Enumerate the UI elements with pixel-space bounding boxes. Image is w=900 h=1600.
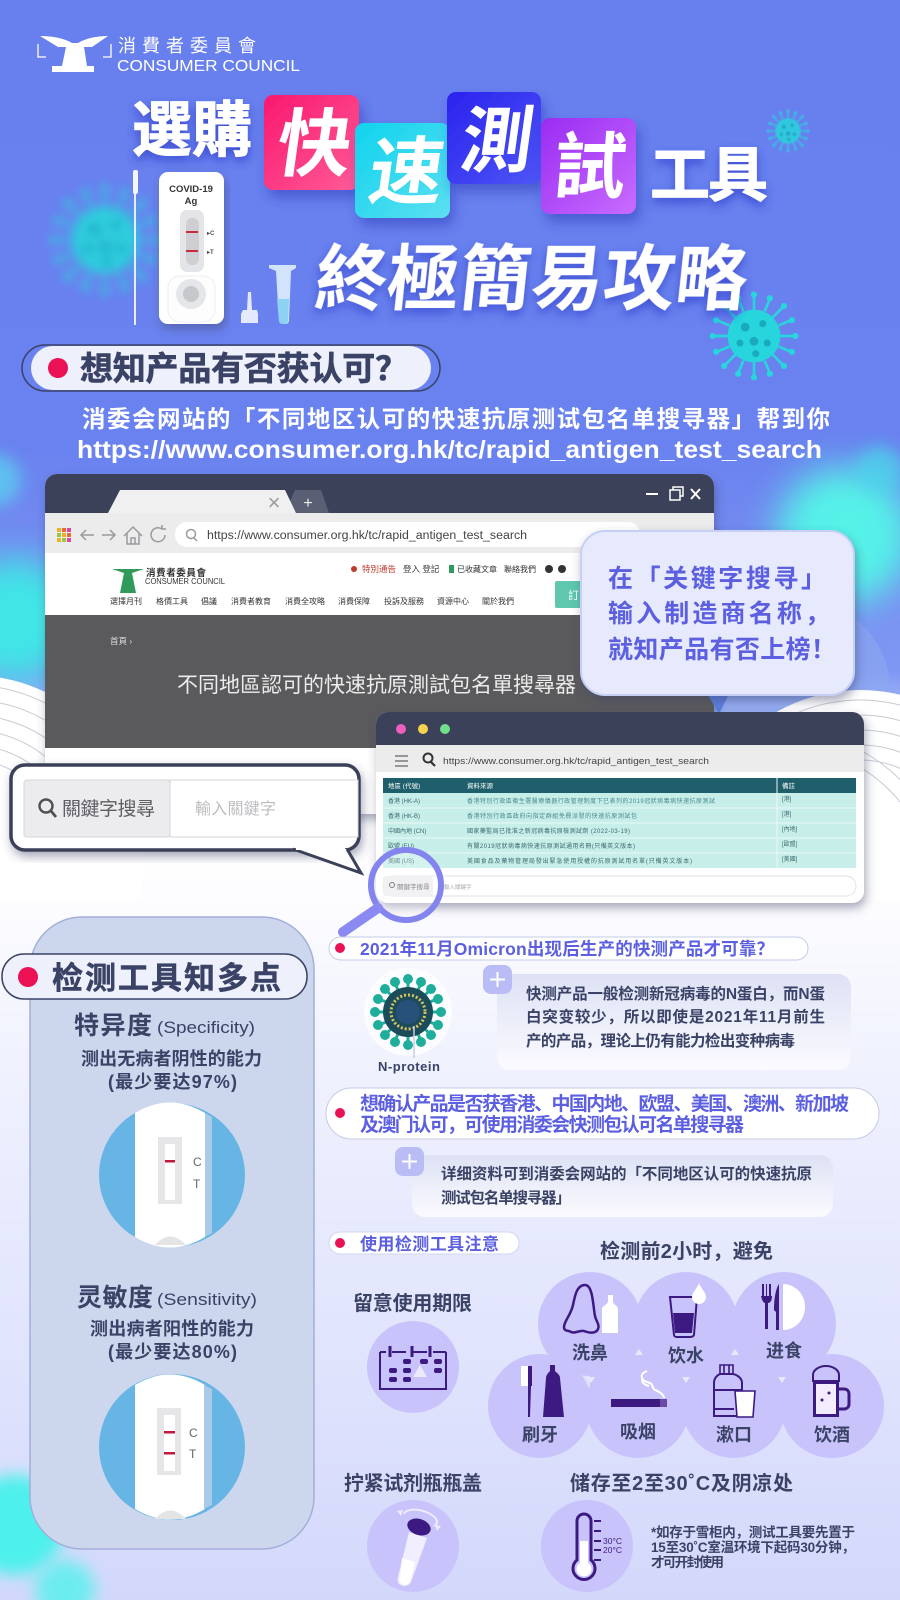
window bar — [376, 712, 864, 745]
table: 美國 (US) — [388, 857, 414, 865]
pill: approval check — [326, 1088, 879, 1139]
card: details — [395, 1147, 833, 1217]
icon: virus top right — [767, 110, 809, 152]
icon: cutlery — [761, 1284, 805, 1361]
specificity text — [74, 1012, 262, 1092]
note: expiry date — [353, 1291, 472, 1413]
icon: scales of justice — [38, 36, 111, 72]
table: 香港特別行政區衞生署醫療儀器行政管理制度下已表列的2019冠狀病毒病快速抗原測試 — [467, 797, 715, 805]
heading: 检测工具知多点 — [2, 954, 307, 999]
title: 工具: 工具 — [650, 142, 768, 209]
site nav: 消費保障 — [338, 596, 370, 606]
site logo: 消費者委員會 — [146, 567, 206, 579]
card: details: 测试包名单搜寻器」 — [441, 1188, 571, 1207]
site hero: 不同地區認可的快速抗原測試包名單搜尋器 — [177, 674, 576, 697]
swab — [134, 192, 136, 325]
site top links: 特別通告 — [362, 564, 396, 574]
subscribe button: 訂閱 — [568, 588, 590, 602]
tile: 試: 試 — [551, 128, 630, 208]
site nav: 關於我們 — [482, 596, 514, 606]
cloud circles — [488, 1272, 884, 1458]
tube — [269, 265, 296, 324]
site nav: 格價工具 — [156, 596, 188, 606]
icon: magnifier — [343, 850, 441, 932]
panel: browser window main — [45, 474, 714, 814]
title — [132, 92, 768, 320]
tile: 測: 測 — [456, 102, 539, 182]
note: storage: 储存至2至30˚C及阴凉处 — [570, 1472, 793, 1495]
browser title bar: + — [303, 495, 313, 512]
toolbar: https://www.consumer.org.hk/tc/rapid_antigen_test_search — [443, 756, 709, 767]
toolbar — [376, 745, 864, 772]
sensitivity text: (最少要达80%) — [108, 1342, 237, 1362]
icon: test kit — [133, 170, 296, 325]
site nav: 選擇月刊 — [110, 596, 142, 606]
card: N protein explanation: 产的产品，理论上仍有能力检出变种病毒 — [526, 1031, 795, 1050]
sensitivity text: (Sensitivity) — [157, 1291, 257, 1309]
plus badge — [395, 1147, 424, 1176]
icon: nose: 洗鼻 — [572, 1343, 608, 1363]
specificity text: (最少要达97%) — [108, 1072, 237, 1092]
table: 香港 (HK-B) — [388, 812, 420, 820]
icon: thermometer: 20°C — [603, 1545, 622, 1555]
tile: 速: 速 — [364, 131, 449, 214]
site nav: 倡議 — [201, 596, 217, 606]
note: storage — [541, 1472, 855, 1592]
site header — [45, 553, 714, 615]
storage footnote — [651, 1524, 855, 1570]
sensitivity text: 测出病者阳性的能力 — [90, 1318, 254, 1339]
site top links: 聯絡我們 — [504, 564, 536, 574]
text: search tool intro: 消委会网站的「不同地区认可的快速抗原测试包名单搜寻器」帮到你 — [82, 406, 830, 432]
cassette: ▸T — [206, 250, 214, 256]
icon: N-protein virus — [364, 968, 452, 1074]
dropper — [241, 292, 258, 323]
storage footnote: 15至30˚C室温环境下起码30分钟， — [651, 1539, 855, 1555]
title: 選購: 選購 — [132, 97, 252, 164]
site top links: 已收藏文章 — [457, 564, 497, 574]
callout: keyword search tip: 就知产品有否上榜！ — [608, 636, 836, 664]
test strip C and T — [99, 1374, 245, 1520]
callout: keyword search tip: 输入制造商名称， — [608, 600, 830, 628]
background blurred teal blobs — [0, 446, 900, 1600]
keyword input — [170, 780, 358, 837]
text: search tool intro — [77, 406, 830, 464]
test strip C and T: T — [189, 1447, 197, 1461]
icon: cigarette — [611, 1371, 667, 1442]
specificity text: (Specificity) — [157, 1019, 255, 1037]
search bar: 輸入關鍵字 — [444, 883, 472, 891]
background white wave hills — [0, 619, 900, 802]
table: 中國內地 (CN) — [388, 827, 426, 835]
icon: cigarette: 吸烟 — [620, 1422, 656, 1442]
text: search tool intro: https://www.consumer.org.hk/tc/rapid_antigen_test_search — [77, 436, 822, 464]
sensitivity text — [77, 1284, 257, 1362]
table: [美國] — [782, 855, 798, 863]
browser title bar: × — [268, 490, 280, 515]
storage footnote: *如存于雪柜内，测试工具要先置于 — [651, 1524, 855, 1540]
icon: toothbrush and toothpaste: 刷牙 — [522, 1425, 558, 1445]
site nav: 資源中心 — [437, 596, 469, 606]
card: N protein explanation: 白突变较少，所以即使是2021年11月前生 — [526, 1007, 825, 1026]
table: 香港 (HK-A) — [388, 797, 420, 805]
callout: keyword search tip — [581, 531, 854, 714]
card: details: 详细资料可到消委会网站的「不同地区认可的快速抗原 — [441, 1164, 812, 1183]
cassette: Ag — [185, 196, 198, 207]
cassette — [159, 172, 224, 324]
table: 地區 (代號) — [388, 781, 420, 790]
red dot — [48, 358, 68, 378]
table: 資料來源 — [467, 781, 494, 790]
panel: browser window table — [376, 712, 864, 903]
site hero — [45, 615, 714, 748]
site nav: 消費者教育 — [231, 596, 271, 606]
heading: 检测工具知多点: 检测工具知多点 — [52, 961, 281, 996]
site hero: 首頁 › — [110, 636, 132, 646]
callout: keyword search field — [11, 765, 361, 873]
keyword label: 關鍵字搜尋 — [62, 798, 155, 820]
icon: toothbrush and toothpaste — [521, 1365, 564, 1445]
table: 有關2019冠狀病毒病快速抗原測試通用名冊(只備英文版本) — [467, 842, 635, 850]
table: [內地] — [782, 825, 798, 833]
test strip C only — [99, 1102, 245, 1248]
panel: test tool knowledge — [2, 917, 314, 1549]
callout: keyword search tip: 在「关键字搜寻」 — [608, 565, 826, 593]
site logo — [112, 567, 226, 593]
heading: avoid before test: 检测前2小时，避免 — [600, 1239, 773, 1263]
table — [383, 778, 856, 868]
cassette: ▸C — [206, 231, 215, 237]
icon: beer — [813, 1366, 850, 1445]
icon: glass: 饮水 — [668, 1346, 704, 1366]
specificity text: 测出无病者阴性的能力 — [81, 1048, 262, 1069]
note: tighten cap — [344, 1471, 482, 1592]
test strip C only: T — [193, 1177, 201, 1191]
site top links — [351, 564, 566, 574]
sensitivity text: 灵敏度 — [77, 1284, 153, 1312]
icon: reagent tube — [397, 1510, 441, 1586]
pill: usage notes: 使用检测工具注意 — [360, 1234, 499, 1254]
title: 終極簡易攻略: 終極簡易攻略 — [311, 240, 752, 320]
note: expiry date: 留意使用期限 — [353, 1291, 472, 1315]
icon: mouthwash — [714, 1365, 755, 1445]
browser title bar — [45, 474, 714, 515]
icon: beer: 饮酒 — [814, 1425, 850, 1445]
test strip C only: C — [193, 1155, 202, 1169]
site nav: 投訴及服務 — [384, 596, 424, 606]
table: 香港特別行政區政府向指定群組免費派發的快速抗原測試包 — [467, 812, 637, 820]
card: N protein explanation — [483, 965, 851, 1070]
icon: thermometer: 30°C — [603, 1536, 622, 1546]
subscribe button — [555, 581, 595, 608]
site nav: 消費全攻略 — [285, 596, 325, 606]
icon: thermometer — [573, 1514, 622, 1579]
icon: mouthwash: 漱口 — [716, 1425, 752, 1445]
browser toolbar — [45, 513, 714, 553]
card: N protein explanation: 快测产品一般检测新冠病毒的N蛋白，而N蛋 — [526, 984, 825, 1003]
keyword label — [24, 780, 170, 837]
tile: 快: 快 — [272, 103, 357, 186]
logo text: 消費者委員會 — [118, 36, 256, 56]
table: [港] — [782, 810, 792, 818]
pill: approval check: 想确认产品是否获香港、中国内地、欧盟、美国、澳洲、新加坡 — [360, 1093, 849, 1115]
icon: glass — [668, 1283, 706, 1366]
search bar: 關鍵字搜尋 — [397, 882, 430, 891]
keyword input: 輸入關鍵字 — [195, 800, 276, 818]
logo — [38, 36, 300, 75]
site top links: 登入 登記 — [403, 564, 440, 574]
panel: avoid cloud — [488, 1272, 884, 1458]
table: [港] — [782, 795, 792, 803]
table: 國家藥監局已批准之新冠病毒抗原檢測試劑 (2022-03-19) — [467, 827, 630, 835]
specificity text: 特异度 — [74, 1012, 152, 1040]
table: 備註 — [782, 781, 796, 790]
N-protein label: N-protein — [378, 1059, 440, 1074]
plus badge — [483, 965, 512, 994]
heading: 想知产品有否获认可: 想知产品有否获认可？ — [80, 350, 408, 387]
table: [歐盟] — [782, 840, 798, 848]
storage footnote: 才可开封使用 — [651, 1554, 724, 1570]
icon: virus left — [49, 184, 161, 296]
table: 美國食品及藥物管理局發出緊急使用授權的抗原測試用名單(只備英文版本) — [467, 857, 692, 865]
site nav — [110, 596, 514, 606]
small arrows — [587, 1349, 786, 1383]
pill: usage notes — [329, 1232, 519, 1254]
search bar — [383, 876, 856, 896]
logo: CONSUMER COUNCIL — [117, 58, 300, 75]
site logo: CONSUMER COUNCIL — [145, 577, 226, 586]
tile: 試 — [541, 118, 636, 214]
note: tighten cap: 拧紧试剂瓶瓶盖 — [344, 1471, 482, 1495]
table: 歐盟 (EU) — [388, 842, 414, 850]
icon: virus bottom right — [710, 292, 798, 380]
heading: 想知产品有否获认可 — [22, 345, 440, 391]
pill: approval check: 及澳门认可，可使用消委会快测包认可名单搜寻器 — [360, 1114, 744, 1136]
browser toolbar: https://www.consumer.org.hk/tc/rapid_antigen_test_search — [207, 530, 527, 542]
icon: cutlery: 进食 — [766, 1340, 802, 1361]
icon: nose — [564, 1285, 618, 1363]
pill: omicron question: 2021年11月Omicron出现后生产的快测产品才可靠？ — [360, 939, 774, 959]
icon: calendar — [380, 1346, 446, 1389]
test strip C and T: C — [189, 1426, 198, 1440]
cassette: COVID-19 — [169, 184, 213, 195]
